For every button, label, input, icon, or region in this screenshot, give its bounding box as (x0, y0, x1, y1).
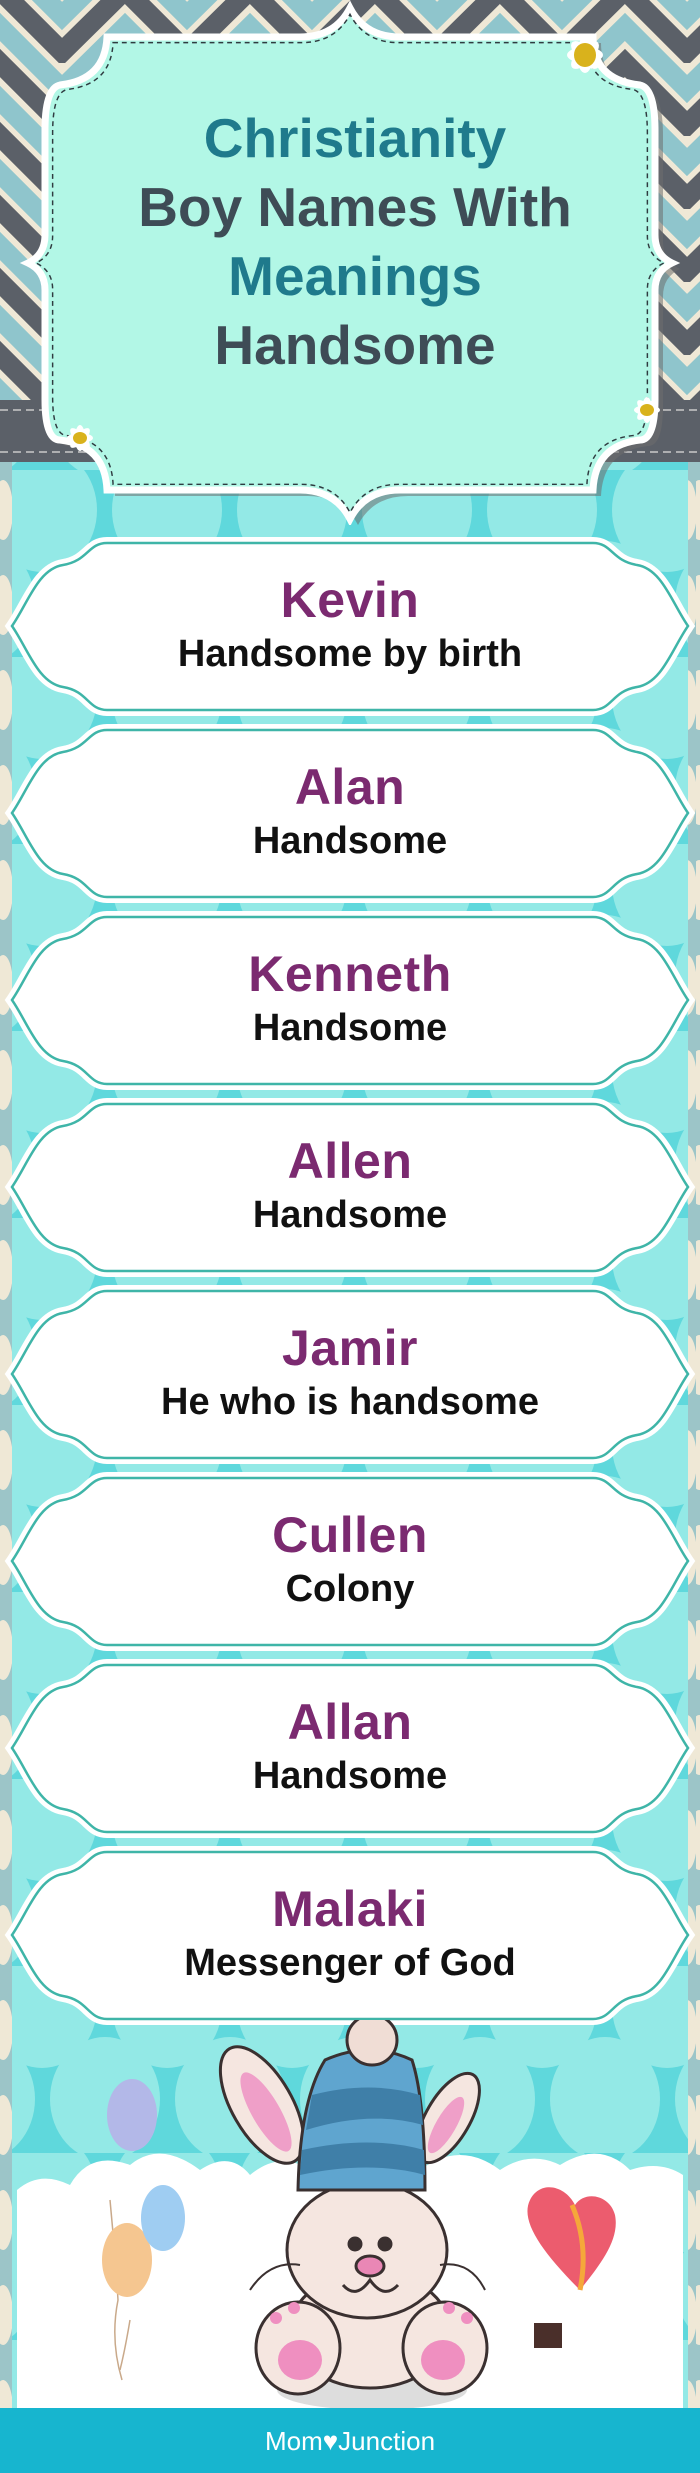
name card: Allan: Allan (288, 1694, 412, 1750)
name card: Kevin: Kevin (281, 572, 419, 628)
name card: Allen: Handsome (253, 1194, 447, 1236)
name card: Allan: Handsome (253, 1755, 447, 1797)
name card: Allen (4, 1098, 696, 1277)
title text (138, 107, 572, 376)
name card: Cullen (4, 1472, 696, 1651)
name card: Kevin (4, 537, 696, 716)
name card: Cullen: Colony (286, 1568, 414, 1610)
balloons (102, 2079, 185, 2380)
name card: Allan (4, 1659, 696, 1838)
name card: Kevin: Handsome by birth (178, 633, 522, 675)
name card: Kenneth (4, 911, 696, 1090)
footer band with logo: Mom♥Junction (265, 2426, 435, 2456)
name card: Alan: Handsome (253, 820, 447, 862)
name card: Malaki (4, 1846, 696, 2025)
name card: Alan: Alan (295, 759, 405, 815)
illustration: bunny scene (17, 2020, 683, 2408)
name card: Jamir (4, 1285, 696, 1464)
name card: Kenneth: Handsome (253, 1007, 447, 1049)
name card: Malaki: Malaki (272, 1881, 428, 1937)
name card: Cullen: Cullen (272, 1507, 428, 1563)
title text: Christianity (204, 107, 506, 169)
name card: Jamir: Jamir (282, 1320, 418, 1376)
footer band with logo (0, 2408, 700, 2473)
icon: daisy left (67, 425, 93, 451)
name card: Malaki: Messenger of God (184, 1942, 516, 1984)
icon: daisy right (634, 397, 660, 423)
icon: daisy top right (567, 40, 603, 73)
bunny (204, 2015, 492, 2410)
name card: Allen: Allen (288, 1133, 412, 1189)
name card: Jamir: He who is handsome (161, 1381, 539, 1423)
title text: Meanings (228, 245, 482, 307)
heart balloon (527, 2187, 616, 2348)
clouds (17, 2154, 683, 2410)
name card: Alan (4, 724, 696, 903)
name card: Kenneth: Kenneth (248, 946, 452, 1002)
title text: Boy Names With (138, 176, 572, 238)
title text: Handsome (214, 314, 496, 376)
title panel (20, 0, 680, 525)
